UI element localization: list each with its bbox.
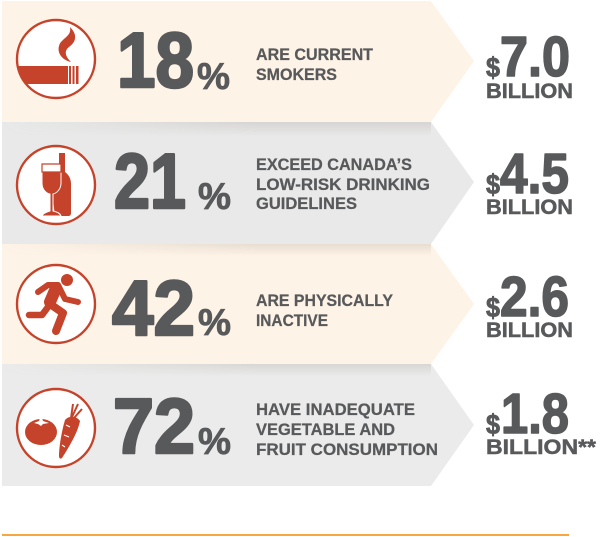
label: drinking guidelines bbox=[256, 156, 430, 213]
panel: row 2 arrow bbox=[2, 122, 474, 244]
cost: $4.5 billion: 4.5 bbox=[500, 142, 569, 206]
cost: $2.6 billion bbox=[486, 265, 573, 342]
stat: 21%: 21 bbox=[114, 137, 186, 225]
stat: 18%: 18 bbox=[117, 16, 194, 104]
cost: $2.6 billion: $ bbox=[486, 292, 500, 323]
stat: 42%: 42 bbox=[112, 264, 195, 352]
cost: $1.8 billion: $ bbox=[486, 409, 500, 440]
label: vegetable and fruit: FRUIT CONSUMPTION bbox=[256, 441, 438, 459]
cost: $1.8 billion: 1.8 bbox=[501, 382, 569, 446]
panel: row 3 arrow bbox=[2, 244, 474, 364]
row 3: inactivity bbox=[2, 244, 573, 364]
row 4: diet bbox=[2, 364, 597, 486]
stat: 21%: % bbox=[198, 176, 231, 217]
cost: $7.0 billion bbox=[486, 25, 573, 103]
label: physically inactive: INACTIVE bbox=[256, 312, 328, 330]
label: current smokers: SMOKERS bbox=[256, 66, 337, 84]
row 1: smokers bbox=[2, 1, 573, 122]
cost: $4.5 billion: BILLION bbox=[486, 196, 573, 219]
label: drinking guidelines: GUIDELINES bbox=[256, 195, 357, 213]
icon: wine glass and bottle bbox=[17, 146, 95, 224]
cost: $4.5 billion bbox=[486, 142, 573, 219]
panel: row 4 arrow bbox=[2, 364, 474, 486]
cost: $7.0 billion: $ bbox=[486, 52, 500, 83]
label: current smokers: ARE CURRENT bbox=[256, 46, 373, 64]
stat: 72%: % bbox=[198, 421, 231, 462]
label: physically inactive: ARE PHYSICALLY bbox=[256, 292, 393, 310]
cost: $7.0 billion: BILLION bbox=[486, 80, 573, 103]
cost: $1.8 billion bbox=[486, 382, 597, 459]
icon: tomato and carrot bbox=[17, 389, 95, 467]
cost: $1.8 billion: BILLION** bbox=[486, 436, 597, 459]
label: drinking guidelines: LOW-RISK DRINKING bbox=[256, 176, 430, 194]
label: vegetable and fruit: HAVE INADEQUATE bbox=[256, 401, 415, 419]
icon: cigarette bbox=[16, 20, 95, 98]
label: vegetable and fruit: VEGETABLE AND bbox=[256, 421, 395, 439]
stat: 72%: 72 bbox=[113, 382, 195, 470]
label: drinking guidelines: EXCEED CANADA’S bbox=[256, 156, 412, 174]
icon: runner bbox=[17, 265, 95, 343]
label: current smokers bbox=[256, 46, 373, 84]
cost: $2.6 billion: 2.6 bbox=[500, 265, 569, 329]
stat: 42%: % bbox=[198, 302, 231, 343]
label: physically inactive bbox=[256, 292, 393, 330]
row 2: drinking bbox=[2, 122, 573, 244]
stat: 18%: % bbox=[197, 56, 230, 97]
cost: $4.5 billion: $ bbox=[486, 169, 500, 200]
cost: $2.6 billion: BILLION bbox=[486, 319, 573, 342]
panel: row 1 arrow bbox=[2, 1, 474, 122]
cost: $7.0 billion: 7.0 bbox=[500, 25, 570, 89]
label: vegetable and fruit bbox=[256, 401, 438, 459]
